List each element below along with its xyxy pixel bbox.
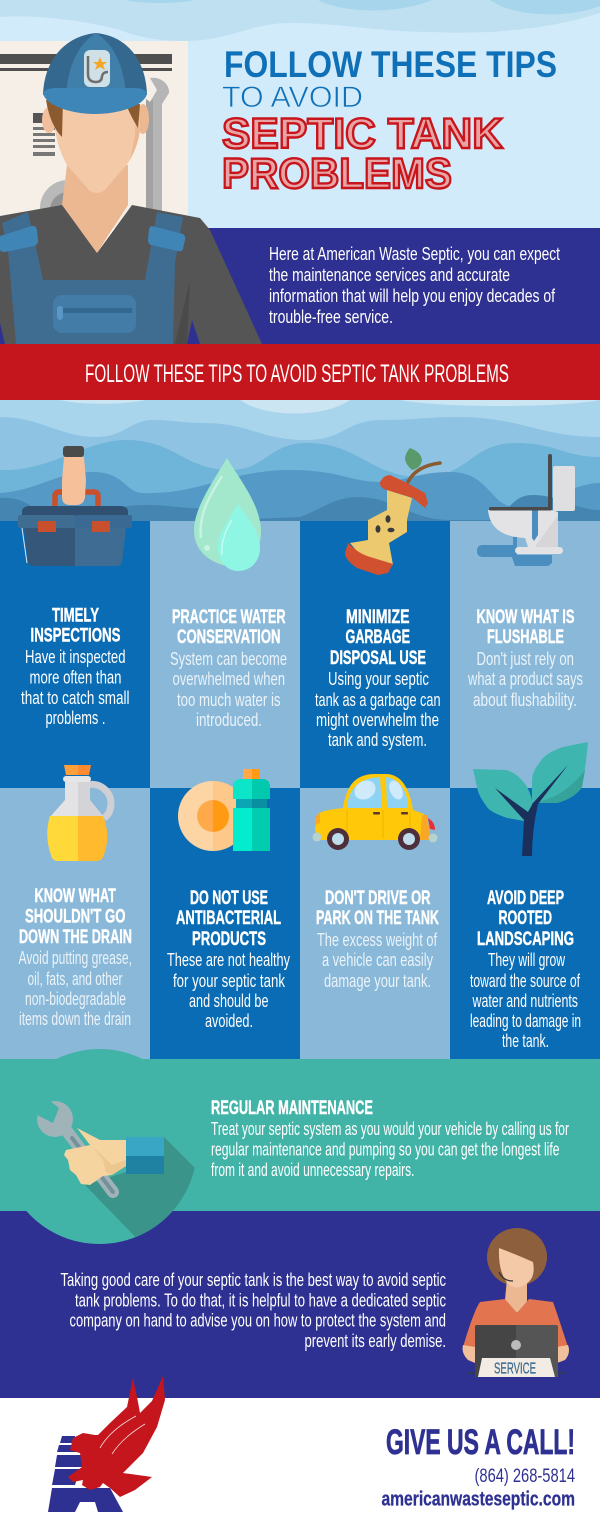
tip: know what is flushable [467,607,583,710]
title line 4: PROBLEMS [222,150,452,198]
icon: water drop [194,458,261,571]
icon: oil jug [47,765,111,861]
tip: practice water conservation: CONSERVATION [177,627,280,648]
intro text: trouble-free service. [269,307,393,327]
tip: do not use antibacterial products: DO NOT USE [190,888,268,909]
tip: do not use antibacterial products: ANTIBACTERIAL [176,908,281,929]
tip: timely inspections: Have it inspected [25,647,126,667]
tip: do not use antibacterial products [167,888,290,1031]
icon: plate and detergent bottle [178,769,270,851]
red banner [0,344,600,400]
tip: don't drive or park on the tank: damage your tank. [324,971,431,991]
tip: do not use antibacterial products: PRODUCTS [192,929,266,950]
wave background [0,400,600,521]
tip: practice water conservation [170,607,287,730]
tip: know what shouldn't go down the drain [18,886,132,1029]
tip: practice water conservation: too much water is [177,690,280,710]
tip: minimize garbage disposal use: tank and system. [328,730,427,750]
tip: avoid deep rooted landscaping: ROOTED [498,908,552,929]
tip: avoid deep rooted landscaping: AVOID DEEP [487,888,564,909]
closing text [60,1270,446,1351]
illustration: technician with wall background [0,33,262,344]
tip: know what shouldn't go down the drain: Avoid putting grease, [18,948,132,968]
tip: timely inspections: more often than [30,668,122,688]
panel: regular maintenance [0,1049,600,1250]
tip: minimize garbage disposal use: might overwhelm the [316,710,439,730]
tip: know what shouldn't go down the drain: non-biodegradable [25,989,126,1009]
tip: don't drive or park on the tank: DON'T DRIVE OR [325,888,431,909]
tip: minimize garbage disposal use: tank as a garbage can [315,690,440,710]
tip: don't drive or park on the tank [316,888,439,991]
tip: don't drive or park on the tank: a vehicle can easily [322,950,433,970]
tip: avoid deep rooted landscaping [470,888,581,1051]
tip: don't drive or park on the tank: The excess weight of [317,930,438,950]
intro text [269,244,560,327]
icon: hand holding wrench [37,1101,194,1237]
tip grid backgrounds [0,521,600,1059]
top header background with waves [0,0,600,228]
icon: toolbox [18,446,132,566]
intro text: the maintenance services and accurate [269,265,510,285]
panel: closing message [0,1211,600,1398]
tip: know what shouldn't go down the drain: DOWN THE DRAIN [19,927,132,948]
tip: practice water conservation: System can become [170,649,287,669]
tip: practice water conservation: introduced. [196,710,262,730]
tip: don't drive or park on the tank: PARK ON THE TANK [316,908,439,929]
title line 2: TO AVOID [222,81,363,114]
icon: plant [473,742,588,856]
tip: know what shouldn't go down the drain: items down the drain [19,1009,131,1029]
maintenance text: REGULAR MAINTENANCE [211,1098,373,1119]
title line 1: FOLLOW THESE TIPS [224,44,557,85]
logo: American Waste Septic eagle [48,1376,165,1512]
tip: minimize garbage disposal use: MINIMIZE [346,607,410,628]
tip: timely inspections [21,606,130,728]
tip: timely inspections: TIMELY [52,606,99,626]
tip: do not use antibacterial products: avoided. [205,1011,253,1031]
icon: leaking toilet [477,454,575,566]
tip: timely inspections: that to catch small [21,688,130,708]
tip: avoid deep rooted landscaping: They will grow [488,950,566,970]
tip: know what shouldn't go down the drain: oil, fats, and other [28,969,122,989]
icon: apple core [345,448,440,575]
maintenance text: from it and avoid unnecessary repairs. [211,1160,414,1180]
closing text: Taking good care of your septic tank is the best way to avoid septic [60,1270,446,1290]
tip: know what is flushable: FLUSHABLE [487,627,564,648]
tip: know what shouldn't go down the drain: KNOW WHAT [34,886,116,907]
tip: timely inspections: problems . [46,708,106,728]
service label: SERVICE [494,1360,536,1378]
intro panel [180,228,600,344]
tip: minimize garbage disposal use: Using your septic [328,669,429,689]
tip: practice water conservation: overwhelmed when [172,669,285,689]
tip: practice water conservation: PRACTICE WATER [172,607,286,628]
maintenance text [211,1098,569,1180]
tip: know what shouldn't go down the drain: SHOULDN'T GO [25,906,125,928]
tip: minimize garbage disposal use: GARBAGE [346,627,410,648]
closing text: prevent its early demise. [304,1331,446,1351]
tip: timely inspections: INSPECTIONS [30,626,120,646]
title [222,44,557,198]
tip: do not use antibacterial products: These are not healthy [167,950,290,970]
tip: do not use antibacterial products: and should be [189,991,268,1011]
icon: yellow car [312,774,438,850]
tip: minimize garbage disposal use [315,607,440,750]
closing text: company on hand to advise you on how to protect the system and [70,1310,446,1330]
call to action [382,1423,575,1510]
title line 3: SEPTIC TANK [222,110,503,158]
tip: avoid deep rooted landscaping: the tank. [502,1031,549,1051]
tip: do not use antibacterial products: for your septic tank [173,971,286,991]
closing text: tank problems. To do that, it is helpful to have a dedicated septic [75,1290,446,1310]
icon: customer service woman [463,1228,569,1378]
tip: minimize garbage disposal use: DISPOSAL USE [330,648,426,669]
